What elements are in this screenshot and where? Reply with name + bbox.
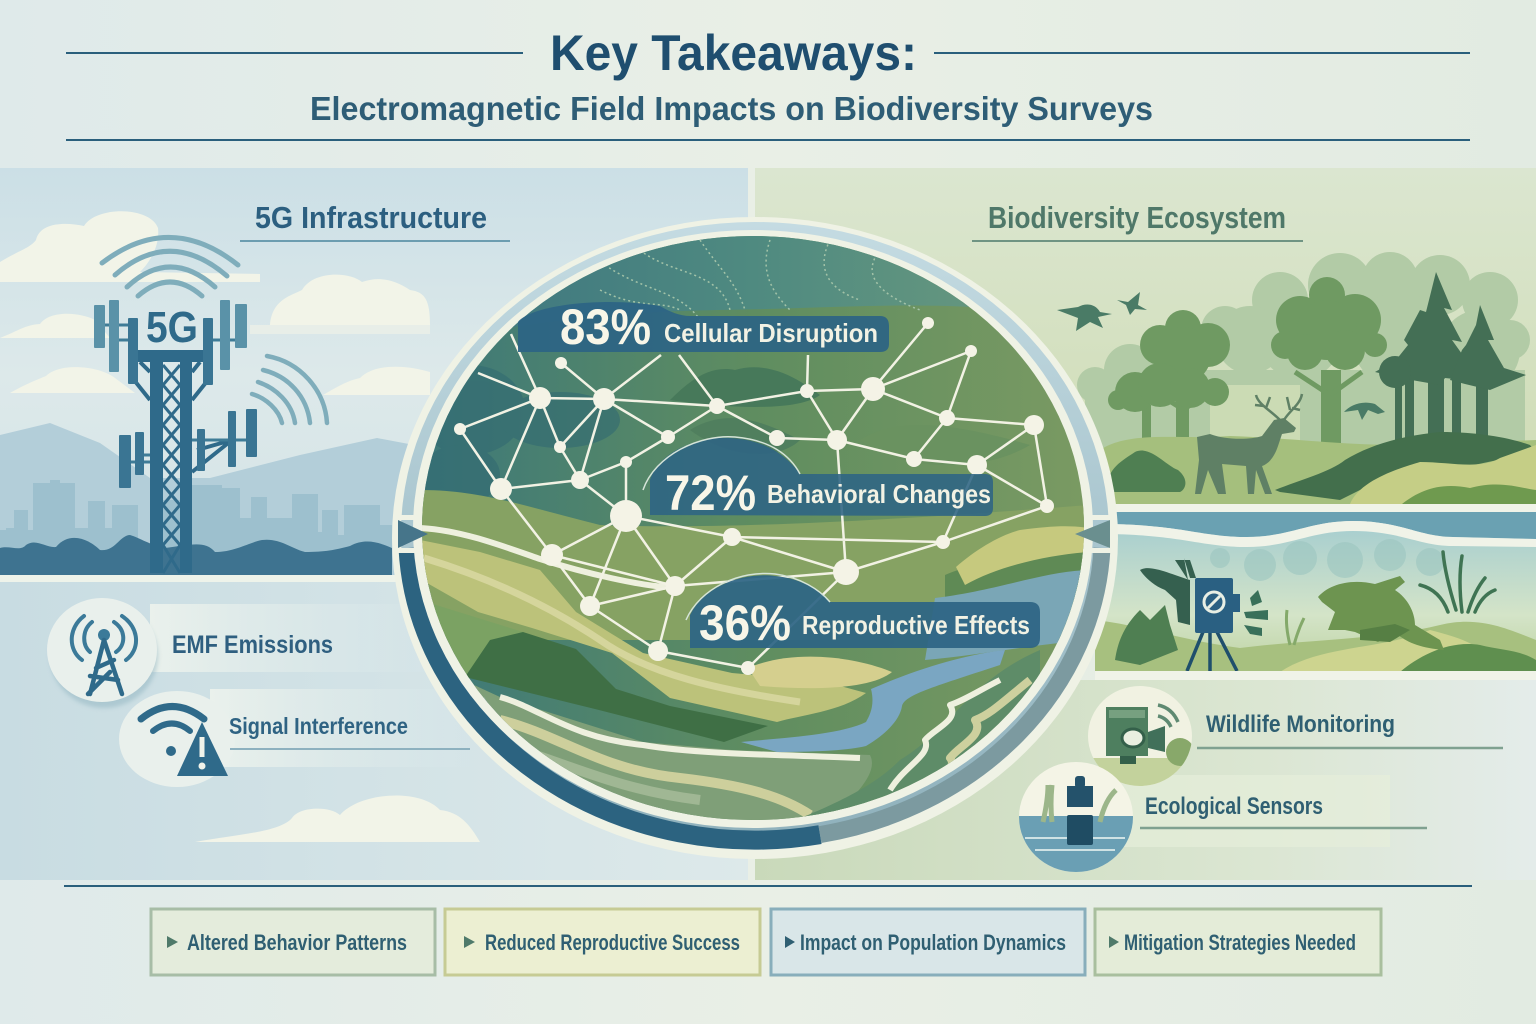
ground xyxy=(1100,436,1536,504)
box: Altered Behavior Patterns: Altered Behavior Patterns xyxy=(187,930,407,955)
callout: 83% xyxy=(518,299,889,355)
forest scene xyxy=(1057,252,1536,504)
heading: 5G Infrastructure: 5G Infrastructure xyxy=(255,200,487,235)
reeds xyxy=(1420,552,1495,612)
landscape base xyxy=(420,235,1088,825)
icon: deer xyxy=(1195,394,1302,494)
item: Signal Interference xyxy=(119,691,470,787)
title block xyxy=(66,25,1470,140)
box: Impact on Population Dynamics xyxy=(771,909,1085,975)
top terrain xyxy=(512,236,969,328)
yellow bushes xyxy=(1350,445,1536,504)
item: Ecological Sensors: Ecological Sensors xyxy=(1145,793,1323,820)
river band xyxy=(1100,504,1536,547)
icon: signal waves right of tower xyxy=(252,356,327,423)
network connections xyxy=(460,323,1047,668)
cloud: bottom left xyxy=(195,795,480,842)
panel: 5G infrastructure xyxy=(0,168,748,880)
icon: aquatic animal xyxy=(1318,576,1444,650)
dark forest slope xyxy=(465,632,768,742)
item: Wildlife Monitoring: Wildlife Monitoring xyxy=(1206,711,1395,738)
lower stripes xyxy=(474,685,872,820)
title: Key Takeaways: xyxy=(550,25,917,81)
mountains xyxy=(0,423,430,575)
back trees xyxy=(1077,252,1530,450)
yellow patch right xyxy=(956,526,1088,585)
mid slopes xyxy=(420,490,1088,640)
arrow: right xyxy=(1075,515,1112,553)
icon: trail camera xyxy=(1187,578,1268,671)
icon: birds xyxy=(1057,292,1385,420)
icon: antenna xyxy=(72,616,136,694)
item: Signal Interference: Signal Interference xyxy=(229,713,408,739)
box: Mitigation Strategies Needed xyxy=(1095,909,1381,975)
dark pines xyxy=(1375,272,1526,460)
label strips xyxy=(150,604,470,767)
takeaway boxes xyxy=(151,909,1381,975)
river right xyxy=(925,570,1088,660)
river xyxy=(741,650,1005,752)
icon: 5G cell tower xyxy=(94,300,257,573)
callout: 36% xyxy=(686,573,1040,651)
clouds: sky xyxy=(0,211,430,395)
forest hill light xyxy=(434,604,522,677)
icon: wifi warning xyxy=(141,706,228,776)
item: EMF Emissions xyxy=(47,598,333,708)
heading: Biodiversity Ecosystem: Biodiversity Ecosystem xyxy=(988,200,1286,235)
stripes left xyxy=(480,697,860,815)
right stripes xyxy=(804,650,1040,816)
label strip xyxy=(1120,775,1390,847)
tree line xyxy=(0,535,392,575)
item: EMF Emissions: EMF Emissions xyxy=(172,631,333,659)
callout: 72% xyxy=(643,437,993,521)
scrub left xyxy=(1115,605,1178,665)
icon: water sensor xyxy=(1019,762,1133,872)
callout: 36%: 36% xyxy=(699,595,791,651)
network nodes xyxy=(454,317,1054,675)
white stream xyxy=(420,528,665,587)
outer ring xyxy=(392,217,1118,859)
subtitle: Electromagnetic Field Impacts on Biodiversity Surveys xyxy=(310,90,1153,127)
callout: 72%: 72% xyxy=(665,465,756,521)
landscape with network xyxy=(415,235,1088,830)
callout: 83%: Cellular Disruption xyxy=(664,318,878,348)
haze xyxy=(1210,385,1300,455)
dark below yellow patch xyxy=(945,548,1088,600)
box: Altered Behavior Patterns xyxy=(151,909,435,975)
item: Ecological Sensors xyxy=(1015,762,1427,876)
dark bushes xyxy=(1108,451,1185,492)
central circle xyxy=(392,217,1118,859)
mid trees xyxy=(1108,277,1387,470)
dark forest patches xyxy=(670,367,1030,465)
icon: wildlife camera xyxy=(1088,686,1200,788)
yellow slope xyxy=(420,540,866,722)
callout: 36%: Reproductive Effects xyxy=(802,610,1030,640)
callout: 72%: Behavioral Changes xyxy=(767,479,991,509)
skyline xyxy=(0,480,392,565)
contour lines xyxy=(600,240,920,320)
arrow: left xyxy=(398,515,428,553)
icon: 5G cell tower: 5G xyxy=(146,303,198,352)
box: Mitigation Strategies Needed: Mitigation Strategies Needed xyxy=(1124,930,1356,955)
panel: biodiversity ecosystem xyxy=(755,168,1536,880)
callout: 83%: 83% xyxy=(560,299,651,355)
box: Reduced Reproductive Success xyxy=(445,909,760,975)
box: Reduced Reproductive Success: Reduced Reproductive Success xyxy=(485,930,740,955)
wetland scene xyxy=(1095,530,1536,672)
box: Impact on Population Dynamics: Impact on Population Dynamics xyxy=(800,930,1066,955)
icon: signal waves above tower xyxy=(102,237,238,296)
icon: hare behind camera xyxy=(1140,558,1196,625)
item: Wildlife Monitoring xyxy=(1088,686,1503,788)
